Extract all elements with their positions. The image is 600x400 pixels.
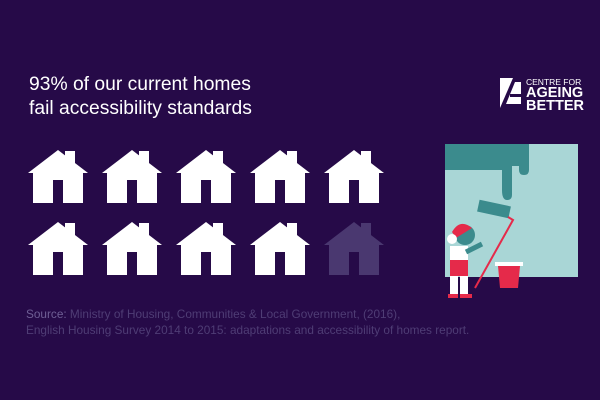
person bbox=[455, 225, 475, 245]
title: 93% of our current homes bbox=[29, 74, 251, 95]
logo bbox=[500, 77, 584, 114]
source text: Source: Ministry of Housing, Communities & Local Government, (2016), bbox=[26, 307, 400, 321]
logo: BETTER bbox=[526, 98, 584, 114]
source text bbox=[26, 307, 469, 337]
title bbox=[29, 74, 252, 119]
logo: CENTRE FOR bbox=[526, 77, 581, 87]
roller bbox=[477, 200, 511, 218]
houses grid bbox=[28, 150, 384, 275]
illustration: painter and wall bbox=[445, 144, 578, 298]
source text: English Housing Survey 2014 to 2015: adaptations and accessibility of homes report. bbox=[26, 323, 469, 337]
title: fail accessibility standards bbox=[29, 98, 252, 119]
logo: AGEING bbox=[526, 85, 583, 101]
wall bbox=[445, 144, 578, 277]
bucket bbox=[495, 262, 523, 266]
